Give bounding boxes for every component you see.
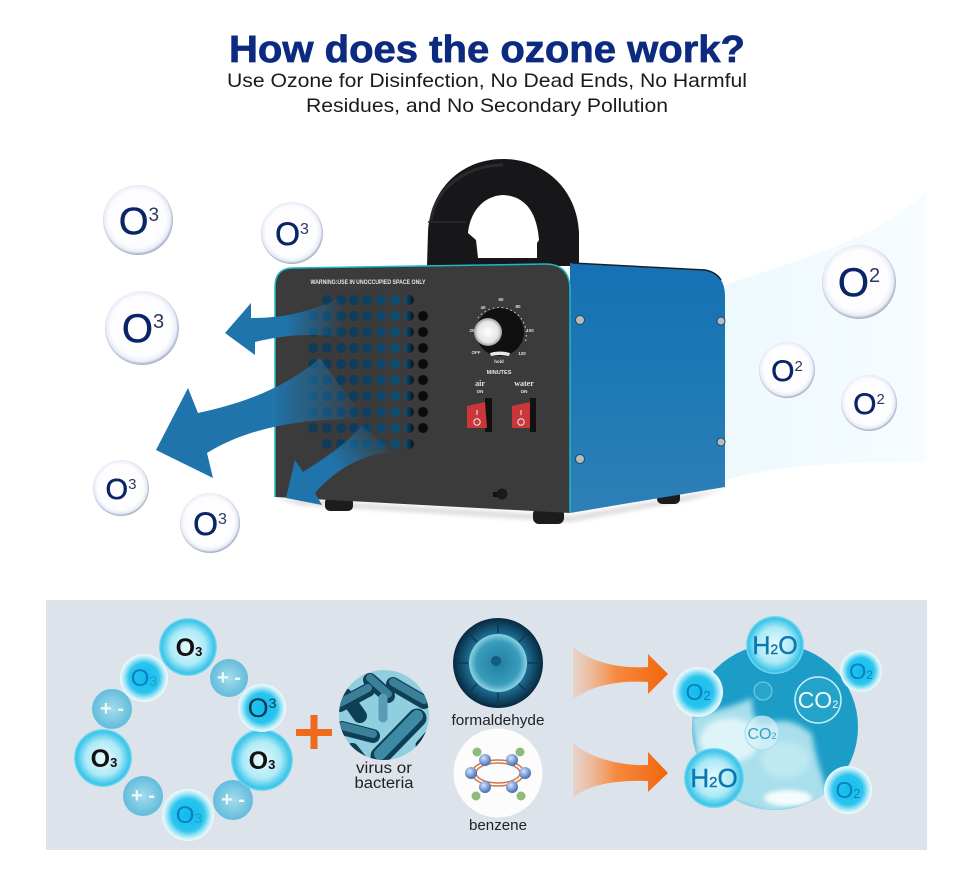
O2 bubble 2: O (771, 355, 794, 388)
small O3 bubbles: O (248, 693, 269, 723)
icon: formaldehyde virus (453, 618, 543, 708)
timer dial: hold (494, 359, 504, 364)
bubble CO2 small (745, 716, 779, 750)
O3 bubble 2: 3 (300, 221, 309, 238)
timer dial: OFF (472, 350, 481, 355)
O3 bubble 4: 3 (128, 476, 136, 493)
icon: benzene molecule (454, 728, 542, 818)
O3 bubble 3 (105, 291, 179, 365)
ozone ring (74, 618, 293, 841)
bubble H2O bottom (684, 748, 744, 808)
O3 bubble 4: O (106, 474, 128, 506)
O3 bubble 5: 3 (218, 511, 227, 528)
O3 bubble 2 (261, 202, 323, 264)
bubble CO2 small: CO2 (747, 726, 777, 743)
charge bubbles: + - (217, 667, 241, 689)
plus sign (296, 715, 332, 749)
air switch: ON (477, 389, 483, 394)
O3 bubble 5: O (193, 506, 218, 542)
water switch: ON (521, 389, 527, 394)
benzene label: benzene (469, 818, 527, 834)
icon: bacteria (339, 670, 429, 760)
O3 bubble 1: 3 (148, 205, 159, 226)
virus or bacteria label (354, 760, 414, 792)
bubble CO2 large: CO2 (798, 687, 838, 713)
bubble H2O top (746, 616, 804, 674)
hose connector (493, 488, 508, 500)
blue side panel (570, 263, 725, 513)
large O3 bubbles: O3 (176, 634, 202, 662)
bubble O2 right: O2 (849, 659, 873, 684)
O2 bubble 1: 2 (869, 265, 880, 287)
O2 bubble 2: 2 (794, 358, 803, 375)
timer dial: 60 (498, 297, 504, 302)
water switch (512, 379, 536, 432)
cloud (690, 698, 830, 815)
charge bubbles: + - (100, 698, 124, 720)
timer dial: 100 (526, 328, 534, 333)
arrow: middle ozone outflow (156, 358, 365, 478)
timer dial: 40 (480, 305, 486, 310)
formaldehyde label: formaldehyde (452, 713, 544, 729)
small O3 bubbles (120, 654, 286, 841)
large O3 bubbles (74, 618, 293, 791)
vent holes (308, 295, 428, 449)
charge bubbles (92, 659, 253, 820)
small empty bubble (754, 682, 772, 700)
feet (325, 490, 680, 524)
arrow: lower ozone outflow (286, 425, 392, 505)
result sphere (690, 644, 858, 815)
bubble H2O top: H2O (752, 632, 798, 660)
front black panel (275, 264, 570, 513)
timer dial: 20 (469, 328, 475, 333)
floor shadow (275, 489, 725, 522)
oxygen outflow light beam (725, 190, 927, 480)
virus or bacteria label: virus or (356, 760, 412, 777)
handle (427, 159, 579, 266)
bubble CO2 large (795, 677, 841, 723)
timer dial: 80 (515, 304, 521, 309)
air switch: air (475, 379, 485, 388)
bubble O2 left (673, 667, 723, 717)
virus or bacteria label: bacteria (354, 775, 414, 792)
ozone generator device (275, 159, 725, 524)
O3 bubble 5 (180, 493, 240, 553)
O2 bubble 3 (841, 375, 897, 431)
large O3 bubbles: O3 (91, 745, 117, 773)
warning label: WARNING:USE IN UNOCCUPIED SPACE ONLY (310, 279, 426, 286)
O3 bubble 1: O (119, 201, 148, 243)
small O3 bubbles: O3 (131, 665, 157, 692)
bubble O2 bottom right: O2 (835, 777, 861, 803)
arrow: lower orange (573, 743, 668, 798)
small O3 bubbles: 3 (269, 695, 277, 711)
small O3 bubbles: O3 (176, 802, 202, 829)
bubble O2 left: O2 (685, 679, 711, 705)
O3 bubble 3: O (122, 307, 153, 351)
O3 bubble 4 (93, 460, 149, 516)
rivets (576, 316, 725, 464)
O2 bubble 2 (759, 342, 815, 398)
O2 bubble 3: 2 (876, 391, 885, 408)
O3 bubble 2: O (275, 216, 300, 252)
panel: ozone reaction (46, 600, 927, 850)
arrow: upper orange (573, 647, 668, 700)
timer dial (469, 297, 534, 364)
subtitle: Use Ozone for Disinfection, No Dead Ends, No Harmful (227, 70, 747, 92)
timer dial: 120 (518, 351, 526, 356)
arrow: upper ozone outflow (225, 296, 345, 355)
title: How does the ozone work? (229, 29, 745, 71)
bubble O2 bottom right (824, 766, 872, 814)
O2 bubble 1 (822, 245, 896, 319)
large O3 bubbles: O3 (249, 747, 275, 775)
bubble H2O bottom: H2O (690, 763, 738, 793)
charge bubbles: + - (131, 785, 155, 807)
O2 bubble 1: O (838, 261, 869, 305)
O2 bubble 3: O (853, 388, 876, 421)
air switch (467, 379, 492, 432)
subtitle (227, 70, 747, 117)
water switch: water (514, 379, 534, 388)
minutes label: MINUTES (487, 370, 512, 376)
subtitle: Residues, and No Secondary Pollution (306, 95, 668, 117)
O3 bubble 1 (103, 185, 173, 255)
O3 bubble 3: 3 (153, 311, 164, 333)
charge bubbles: + - (221, 789, 245, 811)
bubble O2 right (840, 650, 882, 692)
